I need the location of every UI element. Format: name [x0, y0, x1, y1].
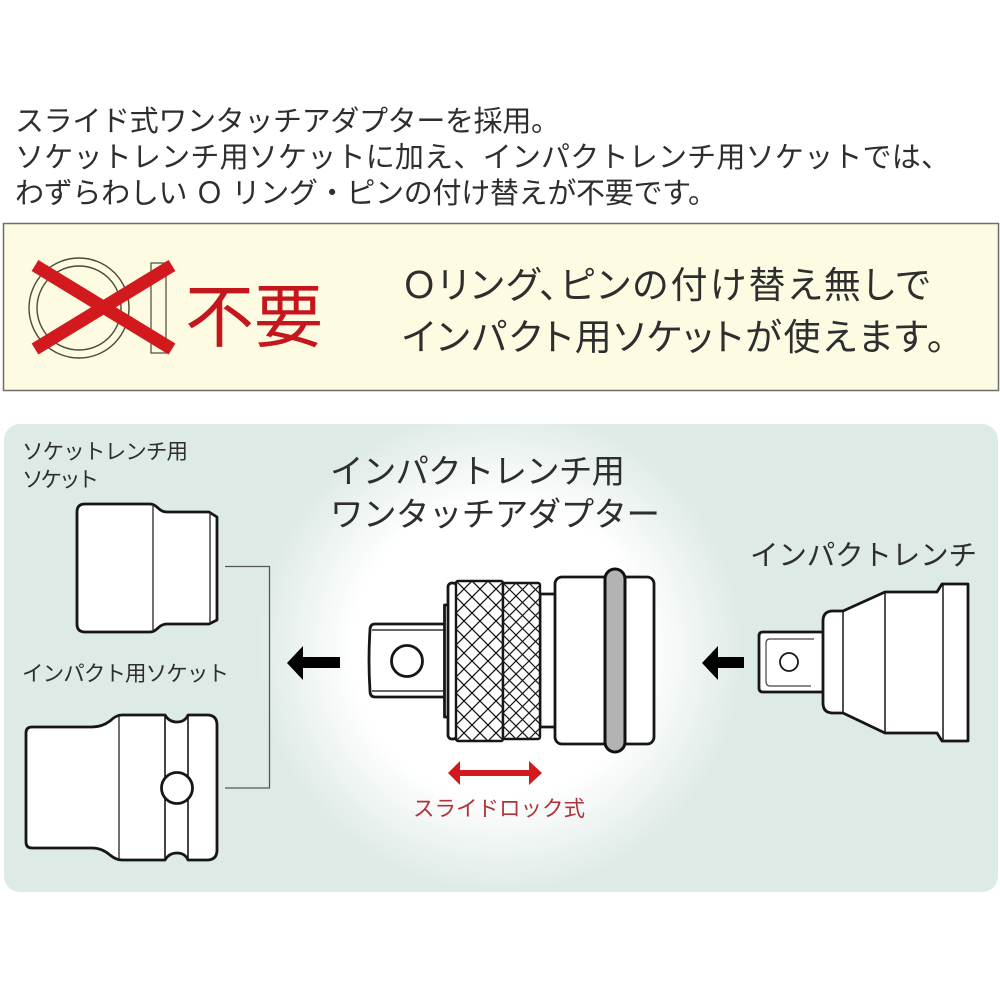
knurled collar — [448, 581, 540, 741]
banner message: インパクト用ソケットが使えます。 — [402, 317, 945, 358]
intro text: わずらわしい Ｏ リング・ピンの付け替えが不要です。 — [15, 177, 717, 210]
adapter title — [330, 454, 660, 534]
banner message — [402, 265, 945, 358]
flange and neck — [444, 594, 556, 727]
O-ring — [605, 569, 625, 752]
icon: crossed-out O-ring and pin — [29, 258, 172, 358]
bracket linking sockets — [225, 566, 270, 788]
arrow: left to sockets — [287, 646, 340, 680]
adapter title: インパクトレンチ用 — [330, 454, 625, 491]
socket wrench socket drawing — [77, 504, 217, 632]
label: impact wrench: インパクトレンチ — [750, 540, 977, 572]
impact socket drawing — [26, 715, 217, 860]
label: socket wrench socket: ソケットレンチ用 — [22, 440, 188, 464]
panel: adapter diagram — [4, 424, 998, 892]
adapter title: ワンタッチアダプター — [330, 497, 660, 534]
label: socket wrench socket — [22, 440, 188, 492]
body — [555, 577, 654, 744]
label: slide lock: スライドロック式 — [413, 797, 585, 821]
square drive — [369, 624, 445, 697]
label: impact socket: インパクト用ソケット — [22, 662, 229, 686]
intro text: スライド式ワンタッチアダプターを採用。 — [15, 105, 560, 138]
impact wrench drawing — [759, 584, 968, 741]
adapter drawing — [369, 569, 654, 752]
panel: not required banner — [4, 224, 998, 390]
arrow: wrench to adapter — [702, 646, 744, 680]
intro text — [15, 105, 950, 210]
label: socket wrench socket: ソケット — [22, 468, 99, 492]
intro text: ソケットレンチ用ソケットに加え、インパクトレンチ用ソケットでは、 — [15, 142, 950, 174]
text: not required: 不要 — [185, 279, 323, 356]
banner message: Ｏリング、ピンの付け替え無しで — [403, 265, 930, 306]
arrow: slide direction — [448, 761, 542, 785]
